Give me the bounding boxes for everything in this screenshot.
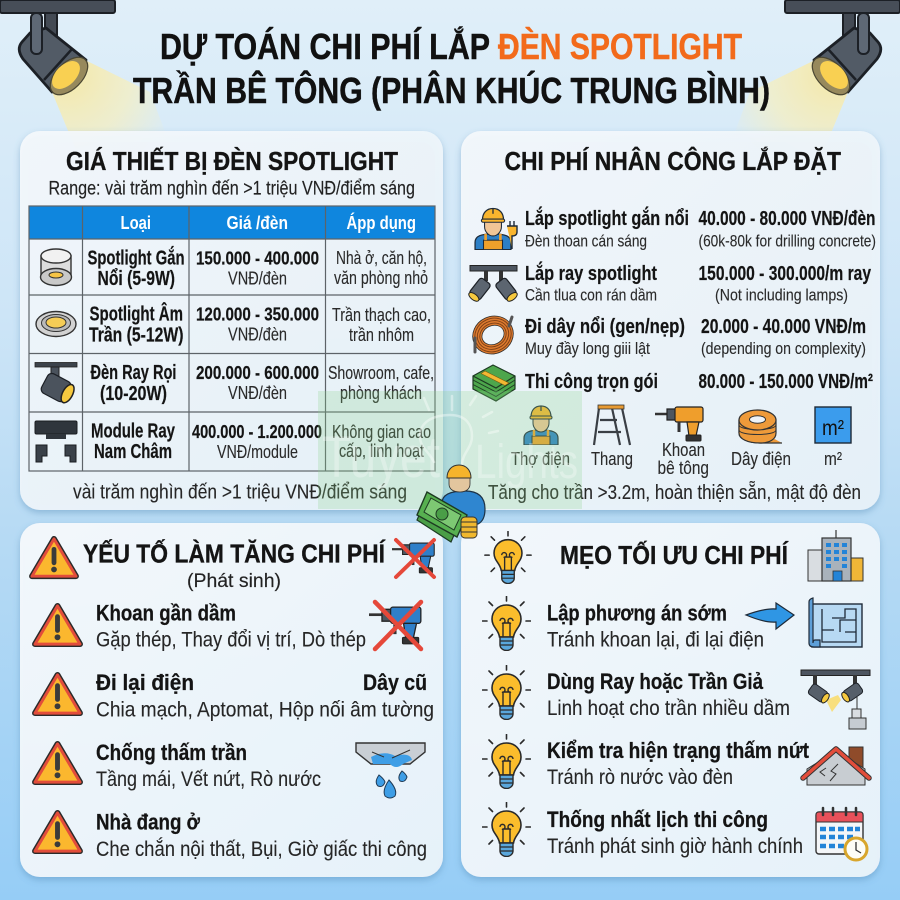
label: m2: m² (824, 448, 842, 469)
row: lắp ray spotlight: Lắp ray spotlight (525, 261, 657, 285)
panel: chi phí nhân công (461, 131, 880, 510)
table: thiết bị: 120.000 - 350.000 (196, 304, 319, 324)
table: thiết bị: Ápp dụng (346, 212, 416, 233)
table: thiết bị: Giá /đèn (226, 212, 288, 233)
icon: downlight gắn nổi (40, 249, 72, 286)
icon: m2: m² (822, 417, 844, 440)
row: lập phương án sớm: Lập phương án sớm (547, 600, 727, 626)
row: đi dây nổi: Đi dây nổi (gen/nẹp) (525, 316, 685, 338)
table: thiết bị: Loại (120, 212, 151, 233)
row: dùng ray (547, 669, 790, 720)
icon: ray spotlight (467, 266, 519, 303)
row: lắp spotlight gắn nổi: Lắp spotlight gắn nổi (525, 206, 689, 230)
table: thiết bị: VNĐ/đèn (228, 268, 287, 288)
table: thiết bị: Nam Châm (94, 441, 172, 463)
subheading: phát sinh: (Phát sinh) (187, 571, 281, 592)
icon: thợ điện (511, 406, 570, 469)
row: thi công trọn gói (525, 371, 873, 393)
panel: yếu tố làm tăng chi phí (20, 523, 443, 877)
table: thiết bị: Trần (5-12W) (89, 324, 184, 346)
row: đi dây nổi: Muy đầy long giii lật (525, 339, 650, 358)
icon: bóng đèn kiểm tra (482, 734, 530, 788)
row: dùng ray: Dùng Ray hoặc Trần Giả (547, 669, 763, 694)
row: khoan gần dầm: Khoan gần dầm (96, 600, 236, 626)
table: thiết bị: trần nhôm (349, 325, 414, 345)
icon: tòa nhà (808, 530, 863, 581)
light beam left (52, 60, 172, 150)
title: TRẦN BÊ TÔNG (PHÂN KHÚC TRUNG BÌNH) (133, 69, 770, 111)
icon: cọc tiền (473, 365, 515, 401)
icon: module ray nam châm (35, 421, 77, 462)
light beam right (728, 60, 848, 150)
label: dây điện: Dây điện (731, 448, 791, 469)
row: khoan gần dầm: Gặp thép, Thay đổi vị trí, Dò thép (96, 628, 366, 652)
label: khoan bê tông: Khoan (662, 439, 705, 460)
icon: cảnh báo khoan (35, 606, 80, 644)
row: thống nhất lịch: Thống nhất lịch thi công (547, 807, 768, 832)
table: thiết bị: Spotlight Âm (90, 302, 183, 326)
title: DỰ TOÁN CHI PHÍ LẮP (160, 25, 490, 67)
icon: lịch và đồng hồ (816, 808, 867, 860)
row: đi dây nổi (525, 316, 866, 358)
row: nhà đang ở: Che chắn nội thất, Bụi, Giờ giấc thi công (96, 836, 427, 861)
title (133, 25, 770, 111)
row: thi công trọn gói: Thi công trọn gói (525, 371, 658, 393)
row: lập phương án sớm (547, 600, 764, 652)
row: lập phương án sớm: Tránh khoan lại, đi lại điện (547, 628, 764, 652)
icon: ray và trần giả (801, 670, 870, 729)
icon: bóng đèn lập phương án (482, 596, 530, 650)
table: thiết bị: Không gian cao (332, 422, 431, 442)
icon: spotlight left (0, 0, 115, 101)
icon: bóng đèn thống nhất lịch (482, 802, 530, 856)
icon: đèn ray rọi (35, 362, 77, 406)
row: chống thấm trần (96, 740, 321, 791)
label: thang: Thang (591, 448, 633, 469)
watermark (318, 391, 582, 509)
table: thiết bị: 150.000 - 400.000 (196, 248, 319, 268)
row: kiểm tra hiện trạng: Tránh rò nước vào đèn (547, 765, 733, 789)
icon: cảnh báo chống thấm (35, 744, 80, 782)
subtitle: range: Range: vài trăm nghìn đến >1 triệu VNĐ/điểm sáng (48, 178, 415, 200)
title: ĐÈN SPOTLIGHT (498, 26, 742, 67)
row: lắp spotlight gắn nổi: Đèn thoan cán sáng (525, 232, 647, 250)
icon: bản vẽ (809, 598, 862, 647)
row: lắp spotlight gắn nổi (525, 206, 876, 250)
row: chống thấm trần: Tầng mái, Vết nứt, Rò nước (96, 767, 321, 791)
row: dùng ray: Linh hoạt cho trần nhiều dầm (547, 696, 790, 720)
row: nhà đang ở: Nhà đang ở (96, 810, 200, 834)
icon: spotlight right (785, 0, 900, 101)
icon: khoan bê tông: bê tông (658, 457, 709, 478)
row: thống nhất lịch: Tránh phát sinh giờ hành chính (547, 834, 803, 858)
table: thiết bị: Spotlight Gắn (88, 246, 184, 270)
watermark: Tuyet (322, 425, 440, 490)
row: chống thấm trần: Chống thấm trần (96, 740, 247, 765)
icon: cuộn dây (469, 312, 517, 358)
icon: cấm khoan (369, 602, 421, 649)
table: thiết bị: Nổi (5-9W) (98, 268, 175, 290)
table: thiết bị: Module Ray (91, 420, 176, 442)
icon: bóng đèn dùng ray (482, 666, 530, 720)
table: thiết bị: phòng khách (340, 383, 422, 403)
icon: cuộn dây điện (731, 410, 791, 469)
table: thiết bị: Showroom, cafe, (328, 363, 434, 383)
heading: mẹo tối ưu: MẸO TỐI ƯU CHI PHÍ (560, 540, 789, 570)
row: thống nhất lịch (547, 807, 803, 858)
table: thiết bị: 200.000 - 600.000 (196, 362, 319, 383)
heading: giá thiết bị: GIÁ THIẾT BỊ ĐÈN SPOTLIGHT (66, 146, 398, 176)
icon: khoan bê tông (655, 407, 709, 478)
icon: đèn âm trần (36, 312, 76, 336)
icon: thợ và tiền ở giữa (417, 465, 485, 542)
icon: trần thấm nước (356, 743, 425, 798)
table: thiết bị: VNĐ/đèn (228, 383, 287, 403)
heading: nhân công: CHI PHÍ NHÂN CÔNG LẮP ĐẶT (504, 146, 841, 176)
icon: thang (591, 405, 633, 469)
row: đi lại điện: Dây cũ (363, 670, 427, 695)
row: lắp ray spotlight (525, 261, 872, 304)
panel: mẹo tối ưu chi phí (461, 523, 880, 877)
icon: cấm khoan tiêu đề (392, 540, 434, 577)
heading: yếu tố tăng chi phí: YẾU TỐ LÀM TĂNG CHI PHÍ (83, 538, 386, 568)
table: thiết bị: Nhà ở, căn hộ, (336, 248, 427, 268)
label: thợ điện: Thợ điện (511, 448, 570, 469)
row: đi lại điện (96, 670, 434, 722)
icon: cảnh báo nhà đang ở (35, 813, 80, 851)
watermark: Lights (475, 436, 578, 489)
row: kiểm tra hiện trạng (547, 738, 809, 789)
row: kiểm tra hiện trạng: Kiểm tra hiện trạng thấm nứt (547, 738, 809, 763)
panel: giá thiết bị (20, 131, 443, 510)
row: đi lại điện: Đi lại điện (96, 670, 194, 695)
table: thiết bị: VNĐ/đèn (228, 324, 287, 344)
table: thiết bị: Trần thạch cao, (332, 305, 431, 325)
table: thiết bị: văn phòng nhỏ (334, 268, 428, 288)
row: lắp ray spotlight: Cần tlua con rán dầm (525, 286, 657, 304)
table: thiết bị: (10-20W) (100, 383, 167, 405)
table: thiết bị (29, 206, 435, 471)
row: nhà đang ở (96, 810, 427, 861)
table: thiết bị: 400.000 - 1.200.000 (192, 421, 322, 442)
icon: cảnh báo đi lại điện (35, 675, 80, 713)
icon: mái nhà nứt (803, 747, 869, 785)
arrow: sang bản vẽ (746, 603, 794, 629)
icon: bóng đèn tiêu đề (485, 531, 531, 584)
row: lắp ray spotlight: (Not including lamps) (715, 286, 848, 304)
table: thiết bị: Đèn Ray Rọi (90, 362, 176, 384)
footer note: giá thiết bị: vài trăm nghìn đến >1 triệu VNĐ/điểm sáng (73, 480, 407, 504)
row: đi dây nổi: (depending on complexity) (701, 339, 866, 358)
icon: thợ điện cắm phích (475, 208, 517, 250)
table: thiết bị: cấp, linh hoạt (339, 441, 424, 461)
table: thiết bị: VNĐ/module (217, 442, 298, 462)
row: đi lại điện: Chia mạch, Aptomat, Hộp nối âm tường (96, 698, 434, 722)
icon: cảnh báo tiêu đề (32, 539, 76, 576)
row: khoan gần dầm (96, 600, 366, 652)
icon: m2 (815, 407, 851, 469)
